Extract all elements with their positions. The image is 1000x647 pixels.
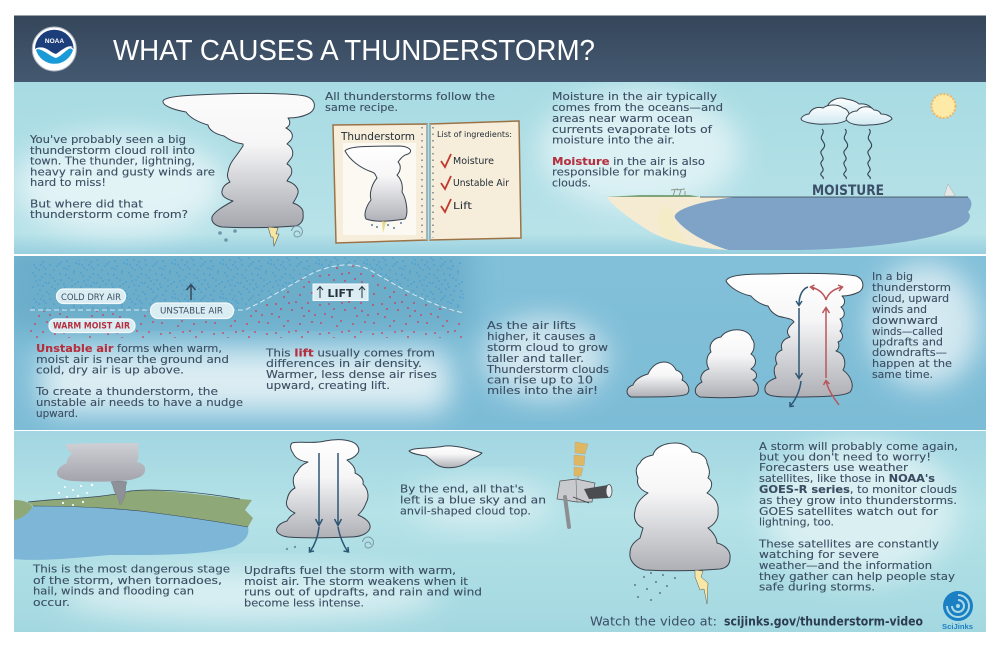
water (14, 506, 248, 560)
title: WHAT CAUSES A THUNDERSTORM? (113, 35, 595, 67)
text block: updrafts and downdrafts: cloud, upward (872, 292, 949, 305)
panel: section three background (14, 431, 986, 632)
icon: rain drops (218, 229, 237, 242)
text block: cloud growth: storm cloud to grow (487, 341, 608, 354)
text block: recipe (325, 90, 495, 114)
land strip (28, 490, 253, 527)
text block: unstable air: To create a thunderstorm, the (35, 385, 218, 398)
text block: dangerous stage: occur. (33, 596, 70, 609)
text block: satellites: watching for severe (759, 548, 879, 561)
text block: intro: thunderstorm cloud roll into (30, 144, 195, 157)
video link (590, 614, 923, 628)
header bar (14, 16, 986, 82)
text block: dangerous stage: This is the most dangerous stage (32, 562, 230, 576)
text block: cloud growth: taller and taller. (487, 352, 584, 365)
illustration: weakening cloud (277, 440, 373, 552)
ingredient: unstable air (441, 176, 510, 189)
text block: updrafts and downdrafts: happen at the (872, 357, 952, 370)
text block: end of storm: left is a blue sky and an (400, 494, 546, 506)
sun (932, 94, 956, 118)
illustration: new thunderstorm cloud (630, 443, 730, 604)
text block: moisture: responsible for making (552, 166, 687, 178)
text block: unstable air: cold, dry air is up above. (36, 364, 184, 376)
arrows: downdrafts (310, 453, 348, 552)
icon: satellite (557, 442, 612, 527)
text block: intro: thunderstorm come from? (30, 208, 188, 221)
text block: cloud growth: miles into the air! (487, 384, 598, 397)
text block: updrafts and downdrafts: winds and (872, 303, 927, 316)
ingredient: lift: Lift (453, 201, 472, 212)
tornado funnel (111, 481, 127, 505)
label: warm moist air: WARM MOIST AIR (53, 322, 130, 332)
icon: SciJinks logo: SciJinks (942, 622, 973, 631)
text block: satellites: GOES satellites watch out for (759, 505, 939, 518)
text block: cloud growth (486, 319, 609, 397)
illustration: mature cloud with updraft and downdraft (726, 273, 863, 406)
text block: satellites: lightning, too. (759, 516, 834, 528)
text block: satellites: Forecasters use weather (759, 461, 909, 474)
text block: recipe: same recipe. (325, 101, 398, 114)
text block: updrafts and downdrafts: updrafts and (872, 336, 943, 348)
text block: updrafts fuel: runs out of updrafts, and rain and wind (244, 586, 482, 598)
text block: satellites: satellites, like those in NOAA's (759, 472, 935, 485)
evaporation cloud (801, 98, 892, 125)
text block: intro: heavy rain and gusty winds are (30, 166, 215, 178)
text block: moisture: clouds. (552, 176, 591, 190)
notebook cloud (345, 146, 411, 221)
text block: moisture: Moisture in the air typically (552, 90, 718, 103)
text block: satellites: as they grow into thunderstorms. (759, 494, 957, 507)
text block: dangerous stage: hail, winds and flooding can (33, 584, 194, 598)
text block: satellites: These satellites are constantly (758, 538, 940, 550)
text block: unstable air: unstable air needs to have a nudge (36, 396, 243, 409)
illustration: notebook recipe (333, 121, 521, 243)
text block: end of storm (400, 482, 546, 518)
text block: moisture: areas near warm ocean (552, 112, 693, 125)
video link: Watch the video at: (590, 614, 717, 628)
evaporation lines (821, 129, 872, 179)
text block: dangerous stage: of the storm, when tornadoes, (33, 574, 222, 587)
label: unstable air: UNSTABLE AIR (160, 306, 223, 316)
text block: satellites: but you don't need to worry! (759, 450, 931, 464)
text block: updrafts fuel: moist air. The storm weakens when it (244, 575, 469, 588)
ocean (675, 197, 971, 250)
text block: updrafts and downdrafts (872, 270, 952, 381)
text block: intro: hard to miss! (30, 176, 106, 189)
video link: scijinks.gov/thunderstorm-video (724, 614, 923, 628)
panel: section two background (0, 240, 986, 430)
text block: lift: differences in air density. (266, 357, 422, 370)
text block: moisture: Moisture in the air is also (552, 155, 705, 168)
ingredient: lift (441, 199, 472, 212)
text block: satellites: GOES-R series , to monitor clouds (759, 483, 957, 496)
storm cloud (57, 443, 145, 482)
text block: lift: Warmer, less dense air rises (266, 368, 437, 381)
text block: lift (265, 346, 437, 392)
text block: cloud growth: As the air lifts (487, 319, 576, 332)
text block: unstable air: upward. (36, 407, 78, 420)
text block: satellites (758, 440, 958, 594)
notebook storm details (371, 221, 402, 233)
text block: updrafts fuel (244, 564, 482, 610)
illustration: medium cloud (695, 330, 758, 398)
icon: lightning (268, 227, 279, 246)
label: unstable air (150, 303, 234, 318)
text block: satellites: safe during storms. (759, 580, 875, 594)
text block: satellites: weather—and the information (759, 559, 932, 572)
text block: satellites: they gather can help people stay (759, 570, 956, 583)
text block: moisture: currents evaporate lots of (552, 123, 713, 136)
text block: moisture (552, 90, 723, 190)
ingredient: moisture: Moisture (453, 156, 494, 167)
wind swirl (362, 537, 373, 548)
text block: cloud growth: higher, it causes a (487, 330, 596, 343)
text block: unstable air (35, 342, 243, 420)
label: warm moist air (49, 319, 135, 332)
text block: end of storm: anvil-shaped cloud top. (400, 504, 531, 518)
text block: intro: You've probably seen a big (29, 133, 186, 146)
illustration: anvil remnant cloud (409, 446, 482, 468)
icon: NOAA logo (32, 27, 76, 71)
text block: moisture: comes from the oceans—and (552, 101, 723, 114)
illustration: tornado over land and water (14, 443, 253, 560)
ingredients heading: List of ingredients: (437, 130, 512, 139)
ingredient: unstable air: Unstable Air (453, 178, 510, 189)
sailboat (944, 184, 955, 196)
text block: end of storm: By the end, all that's (400, 482, 524, 496)
text block: dangerous stage (32, 562, 230, 609)
text block: unstable air: Unstable air forms when warm, (36, 342, 222, 355)
rain drops (286, 546, 296, 550)
text block: lift: This lift usually comes from (265, 346, 435, 360)
land (606, 195, 700, 197)
text block: updrafts fuel: Updrafts fuel the storm with warm, (244, 564, 456, 577)
text block: moisture: moisture into the air. (552, 134, 675, 146)
lightning (695, 570, 708, 604)
label: lift (313, 284, 368, 300)
icon: NOAA logo: NOAA (45, 38, 64, 45)
text block: satellites: A storm will probably come again, (759, 440, 958, 453)
ingredient: moisture (441, 154, 494, 167)
text block: cloud growth: can rise up to 10 (487, 374, 593, 386)
text block: intro: town. The thunder, lightning, (30, 154, 195, 168)
moisture label: MOISTURE (812, 183, 884, 199)
text block: lift: upward, creating lift. (266, 379, 390, 392)
label: cold dry air (56, 289, 126, 304)
label: lift: LIFT (328, 287, 354, 300)
text block: updrafts fuel: become less intense. (244, 596, 364, 610)
panel: section one background (14, 82, 986, 254)
notebook title: Thunderstorm (340, 130, 415, 143)
beach (607, 197, 736, 250)
illustration: small cloud (627, 362, 689, 397)
text block: updrafts and downdrafts: same time. (872, 368, 933, 381)
rain dots (634, 572, 676, 601)
arrow: updraft (810, 285, 842, 405)
text block: updrafts and downdrafts: thunderstorm (872, 281, 951, 294)
icon: wind swirl (292, 226, 302, 237)
text block: updrafts and downdrafts: winds—called (872, 325, 943, 338)
arrow: downdraft (790, 287, 808, 406)
chart: air stipple diagram (30, 257, 464, 338)
text block: updrafts and downdrafts: downward (872, 314, 938, 327)
label: cold dry air: COLD DRY AIR (61, 293, 121, 303)
text block: recipe: All thunderstorms follow the (325, 90, 495, 103)
text block: cloud growth: Thunderstorm clouds (486, 363, 609, 376)
illustration: big thunderstorm cloud (163, 93, 314, 246)
illustration: ocean evaporation scene (606, 94, 971, 250)
hail (58, 484, 93, 506)
text block: intro: But where did that (30, 198, 144, 210)
text block: intro (29, 133, 215, 221)
text block: updrafts and downdrafts: downdrafts— (872, 346, 947, 359)
text block: updrafts and downdrafts: In a big (872, 270, 913, 283)
text block: unstable air: moist air is near the ground and (36, 353, 229, 366)
arrow: upward (186, 284, 196, 300)
icon: SciJinks logo (942, 591, 973, 631)
